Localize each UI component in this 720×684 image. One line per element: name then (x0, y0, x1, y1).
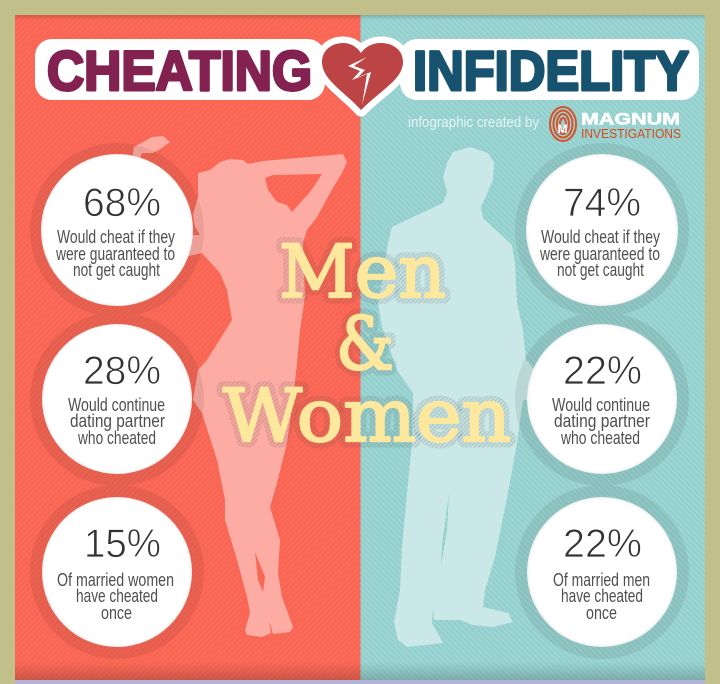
stat: women 68%: 68% (83, 181, 161, 225)
logo: Magnum Investigations: INVESTIGATIONS (581, 126, 681, 141)
title: INFIDELITY (413, 39, 689, 102)
bottom lavender band (15, 680, 705, 684)
stat: men 22% married (527, 497, 677, 647)
stat: men 22% married: Of married men (553, 569, 650, 590)
stat: men 22% continue (527, 324, 677, 474)
stat: men 74%: 74% (563, 181, 641, 225)
stat: men 22% married: have cheated (561, 585, 643, 606)
headline: Men & Women: Women (223, 374, 511, 459)
stat: women 68%: Would cheat if they (57, 226, 176, 247)
stat: men 74%: Would cheat if they (541, 226, 661, 247)
logo: Magnum Investigations (550, 107, 681, 141)
stat: men 22% continue: who cheated (560, 427, 640, 448)
headline: Men & Women: & (336, 302, 394, 387)
stat: women 28% (42, 324, 192, 474)
panel: women (red) (15, 15, 360, 680)
stat: men 22% married: once (586, 602, 617, 623)
stat: women 28%: Would continue (68, 394, 165, 415)
stat: men 22% continue: 22% (563, 349, 642, 393)
stat: men 22% married: 22% (563, 522, 642, 566)
stat: women 68%: were guaranteed to (55, 243, 175, 264)
icon: broken heart (322, 43, 403, 110)
stat: women 28%: 28% (83, 349, 161, 393)
stat: women 15%: 15% (84, 522, 161, 566)
headline: Men & Women: Men (279, 230, 446, 315)
title: CHEATING (47, 39, 312, 102)
stat: women 15%: have cheated (76, 585, 158, 606)
stat: women 28%: who cheated (77, 427, 156, 448)
stat: women 68%: not get caught (73, 259, 160, 280)
headline: Men & Women (223, 230, 511, 459)
stat: women 28%: dating partner (70, 410, 165, 431)
silhouette: man (378, 147, 535, 647)
credit line: infographic created by (408, 115, 540, 131)
panel: men (teal) (360, 15, 705, 680)
silhouette: woman (132, 136, 347, 637)
circle rings (30, 143, 689, 659)
logo: Magnum Investigations: MAGNUM (581, 110, 680, 128)
stat: women 15% (42, 497, 192, 647)
stat: men 22% continue: Would continue (552, 394, 650, 415)
stat: women 15%: Of married women (57, 569, 174, 590)
stat: men 74%: were guaranteed to (539, 243, 660, 264)
stat: men 22% continue: dating partner (554, 410, 650, 431)
stat: women 15%: once (101, 602, 132, 623)
stat: men 74%: not get caught (557, 259, 644, 280)
stat: women 68% (41, 154, 193, 306)
headline: Men & Women: & (336, 302, 394, 387)
title (35, 39, 699, 110)
icon: fingerprint: M (558, 122, 568, 136)
headline: Men & Women: Women (223, 374, 511, 459)
headline: Men & Women: Men (279, 230, 446, 315)
stat: men 74% (526, 154, 678, 306)
